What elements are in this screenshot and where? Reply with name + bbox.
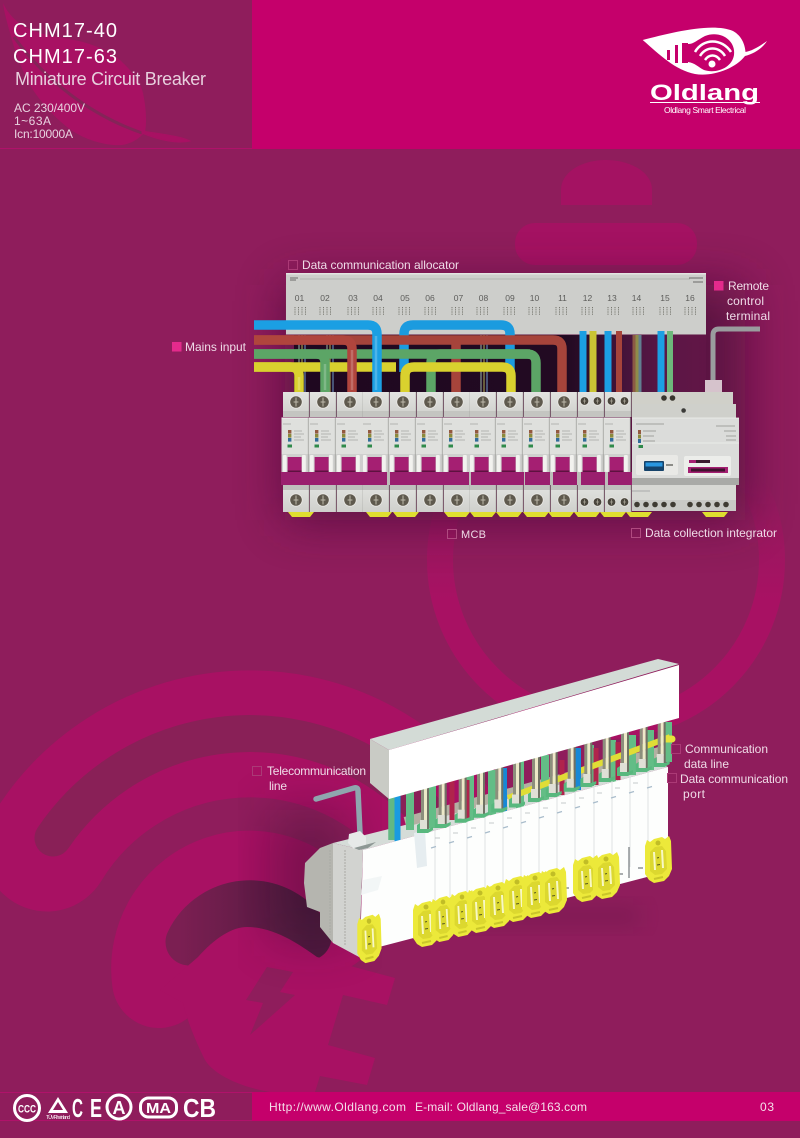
- white module bodies: [360, 767, 668, 952]
- subtitle: Miniature Circuit Breaker: [15, 69, 206, 89]
- callout: communication data line: [672, 742, 768, 771]
- callout: MCB: [448, 529, 486, 541]
- icon: TUV mark: [46, 1097, 70, 1121]
- certification logos: [14, 1093, 216, 1123]
- module seams: [431, 771, 652, 920]
- product front view: [254, 273, 760, 517]
- port numbers: 02: [320, 293, 330, 303]
- icon: CE mark: [72, 1093, 102, 1123]
- port numbers: 06: [425, 293, 435, 303]
- callout: communication data line: data line: [684, 757, 729, 771]
- port numbers: 11: [558, 293, 567, 303]
- yellow rail clips: [288, 512, 728, 517]
- icon: CCC mark: [14, 1096, 40, 1120]
- watermark: wifi plug shapes: [47, 160, 772, 1092]
- port numbers: 07: [454, 293, 463, 303]
- page number: 03: [760, 1100, 774, 1114]
- yellow rail clips: [357, 836, 672, 963]
- callout: telecommunication line: Telecommunication: [267, 764, 366, 778]
- callout: telecommunication line: [252, 764, 366, 793]
- icon: CA mark: A: [112, 1098, 126, 1118]
- port numbers: 05: [400, 293, 410, 303]
- ratings text: [14, 101, 85, 141]
- logo: [643, 28, 767, 115]
- port numbers: 10: [530, 293, 539, 303]
- fine data wires: [299, 335, 640, 392]
- port numbers: 13: [607, 293, 617, 303]
- port numbers: 08: [479, 293, 488, 303]
- icon: CA mark: [107, 1095, 131, 1119]
- callout: data collection integrator: Data collection integrator: [645, 526, 777, 540]
- remote control wire: [705, 329, 760, 393]
- callout: data communication allocator: Data communication allocator: [302, 258, 459, 272]
- logo wordmark: Oldlang: [650, 80, 759, 105]
- callout: data communication port: port: [683, 787, 706, 801]
- telecommunication wire: [316, 788, 376, 850]
- ratings text: Icn:10000A: [14, 127, 73, 141]
- coloured mains wires: [254, 325, 670, 392]
- header panel: right: [252, 0, 800, 149]
- callout: MCB: MCB: [461, 529, 486, 541]
- callout: data communication port: Data communication: [680, 772, 788, 786]
- product rear 3D view: [304, 659, 679, 963]
- title: CHM17-40: [13, 20, 117, 42]
- footer band: [0, 1092, 800, 1123]
- callout: data communication port: [668, 772, 788, 801]
- contact line: [269, 1100, 587, 1114]
- port numbers: 09: [505, 293, 515, 303]
- port numbers: 01: [295, 293, 304, 303]
- port numbers: 16: [685, 293, 695, 303]
- dark cabinet backing: [294, 335, 706, 393]
- icon: CB mark: CB: [183, 1093, 216, 1123]
- callout: remote control terminal: Remote: [728, 279, 769, 293]
- allocator bar: [286, 273, 706, 334]
- port numbers: 15: [660, 293, 670, 303]
- data port pillars: [417, 704, 670, 833]
- callout: mains input: Mains input: [185, 340, 247, 354]
- icon: CE mark: C: [72, 1093, 83, 1123]
- wires behind modules: [392, 722, 672, 842]
- allocator block: [370, 659, 679, 799]
- title: CHM17-63: [13, 46, 117, 68]
- port numbers: 04: [373, 293, 383, 303]
- icon: CCC mark: CCC: [18, 1104, 36, 1116]
- icon: leaf watermark: [3, 3, 190, 145]
- icon: TUV mark: TÜVRheinland: [46, 1114, 70, 1121]
- icon: CMA mark: [140, 1098, 176, 1117]
- top deck strip: [333, 760, 668, 850]
- drop shadows: [270, 285, 745, 940]
- data collection integrator module: [632, 392, 739, 511]
- icon: CMA mark: MA: [146, 1100, 171, 1117]
- miniature circuit breakers: [281, 392, 632, 512]
- icon: CE mark: E: [90, 1093, 102, 1123]
- contact line: E-mail: Oldlang_sale@163.com: [415, 1100, 587, 1114]
- breaker handle bars: [281, 472, 632, 485]
- rear side plates: [304, 843, 363, 957]
- port numbers: [295, 293, 695, 303]
- logo caption: Oldlang Smart Electrical: [664, 105, 746, 115]
- port numbers: 03: [348, 293, 358, 303]
- ratings text: 1~63A: [14, 114, 51, 128]
- contact line: Http://www.Oldlang.com: [269, 1100, 406, 1114]
- ratings text: AC 230/400V: [14, 101, 85, 115]
- icon: leaf bulb mark: [643, 28, 767, 75]
- callout: remote control terminal: terminal: [726, 309, 770, 323]
- callout: remote control terminal: control: [727, 294, 764, 308]
- title: [13, 20, 117, 68]
- callout: remote control terminal: [714, 279, 770, 323]
- port numbers: 12: [583, 293, 592, 303]
- header panel: left: [0, 0, 252, 149]
- callout: telecommunication line: line: [269, 779, 287, 793]
- port numbers: 14: [632, 293, 641, 303]
- callout: communication data line: Communication: [685, 742, 768, 756]
